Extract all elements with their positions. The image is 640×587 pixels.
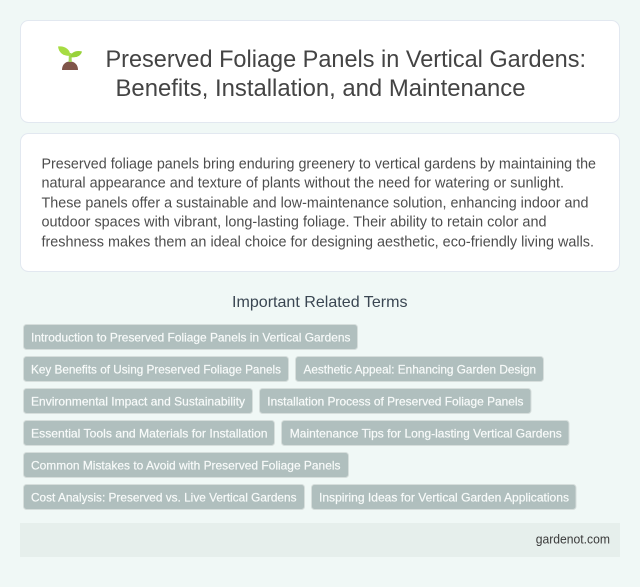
chip: introduction (24, 324, 358, 350)
icon: sprout (58, 46, 82, 70)
chip: essential tools (24, 420, 274, 446)
chip: maintenance tips: Maintenance Tips for Long-lasting Vertical Gardens (290, 426, 562, 440)
chip: environmental impact: Environmental Impact and Sustainability (31, 394, 245, 408)
chip: key benefits: Key Benefits of Using Preserved Foliage Panels (31, 362, 281, 376)
chip: common mistakes: Common Mistakes to Avoid with Preserved Foliage Panels (31, 458, 340, 472)
chip: aesthetic appeal: Aesthetic Appeal: Enhancing Garden Design (304, 362, 536, 376)
panel: description card (20, 134, 620, 272)
chip: inspiring ideas: Inspiring Ideas for Vertical Garden Applications (319, 490, 569, 504)
description text: Preserved foliage panels bring enduring greenery to vertical gardens by maintaining the (42, 155, 596, 172)
description text: natural appearance and texture of plants without the need for watering or sunlight. (42, 174, 564, 192)
chip: cost analysis: Cost Analysis: Preserved vs. Live Vertical Gardens (31, 490, 296, 504)
chip: cost analysis (24, 484, 304, 510)
chip: inspiring ideas (312, 484, 576, 510)
title (106, 46, 586, 102)
chip: maintenance tips (282, 420, 569, 446)
footer bar (20, 523, 620, 557)
chip: introduction: Introduction to Preserved Foliage Panels in Vertical Gardens (31, 330, 350, 344)
title: Benefits, Installation, and Maintenance (116, 75, 526, 102)
chip group: related terms (24, 324, 576, 510)
description text: outdoor spaces with vibrant, long-lasting foliage. Their ability to retain color and (42, 214, 546, 230)
title: Preserved Foliage Panels in Vertical Gardens: (106, 46, 586, 73)
chip: key benefits (24, 356, 288, 382)
chip: installation process (260, 388, 531, 414)
description text: These panels offer a sustainable and low-maintenance solution, enhancing indoor and (42, 194, 588, 211)
panel: header card (20, 20, 620, 122)
description text: freshness makes them an ideal choice for designing aesthetic, eco-friendly living walls. (42, 233, 594, 250)
chip: environmental impact (24, 388, 252, 414)
chip: aesthetic appeal (296, 356, 544, 382)
chip: essential tools: Essential Tools and Materials for Installation (31, 426, 268, 440)
chip: installation process: Installation Process of Preserved Foliage Panels (267, 394, 524, 408)
description text (42, 155, 596, 250)
chip: common mistakes (24, 452, 348, 478)
heading: related terms: Important Related Terms (232, 294, 408, 311)
footer source: gardenot.com (536, 532, 610, 546)
